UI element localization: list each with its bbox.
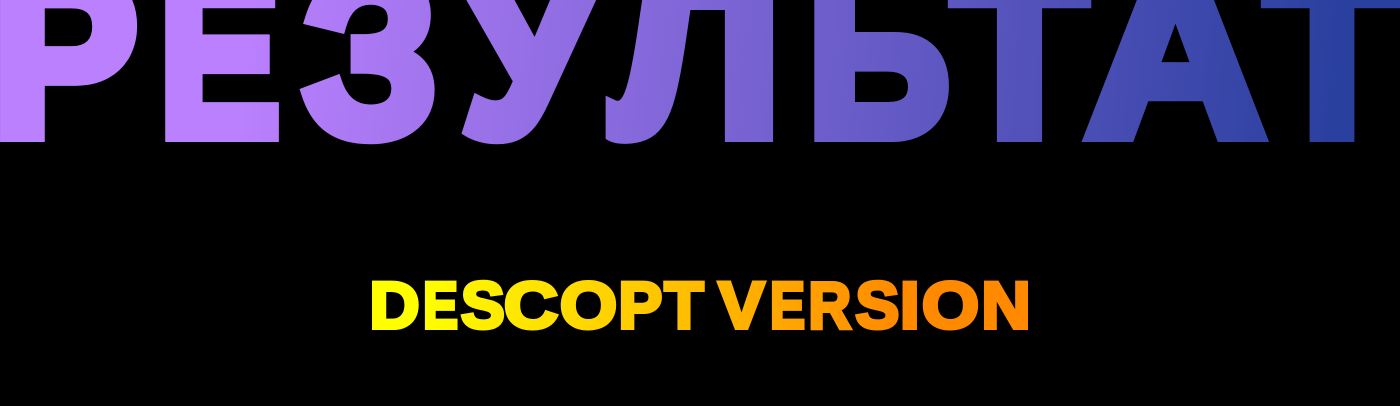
subtitle: DESCOPT VERSION: E bbox=[770, 269, 805, 342]
title: РЕЗУЛЬТАТ bbox=[0, 0, 1399, 185]
subtitle: DESCOPT VERSION: O bbox=[560, 269, 617, 342]
subtitle: DESCOPT VERSION: E bbox=[423, 269, 458, 342]
subtitle: DESCOPT VERSION: C bbox=[504, 269, 558, 342]
subtitle: DESCOPT VERSION: R bbox=[808, 269, 851, 342]
subtitle: DESCOPT VERSION: D bbox=[370, 269, 420, 342]
subtitle: DESCOPT VERSION: P bbox=[618, 269, 662, 342]
subtitle: DESCOPT VERSION: S bbox=[856, 269, 899, 342]
subtitle: DESCOPT VERSION: S bbox=[461, 269, 505, 342]
subtitle: DESCOPT VERSION: T bbox=[664, 269, 704, 342]
subtitle: DESCOPT VERSION: O bbox=[922, 269, 979, 342]
subtitle: DESCOPT VERSION: I bbox=[900, 269, 920, 342]
subtitle: DESCOPT VERSION: V bbox=[718, 269, 765, 342]
subtitle: DESCOPT VERSION: N bbox=[982, 269, 1030, 342]
subtitle: DESCOPT VERSION bbox=[370, 269, 1030, 342]
